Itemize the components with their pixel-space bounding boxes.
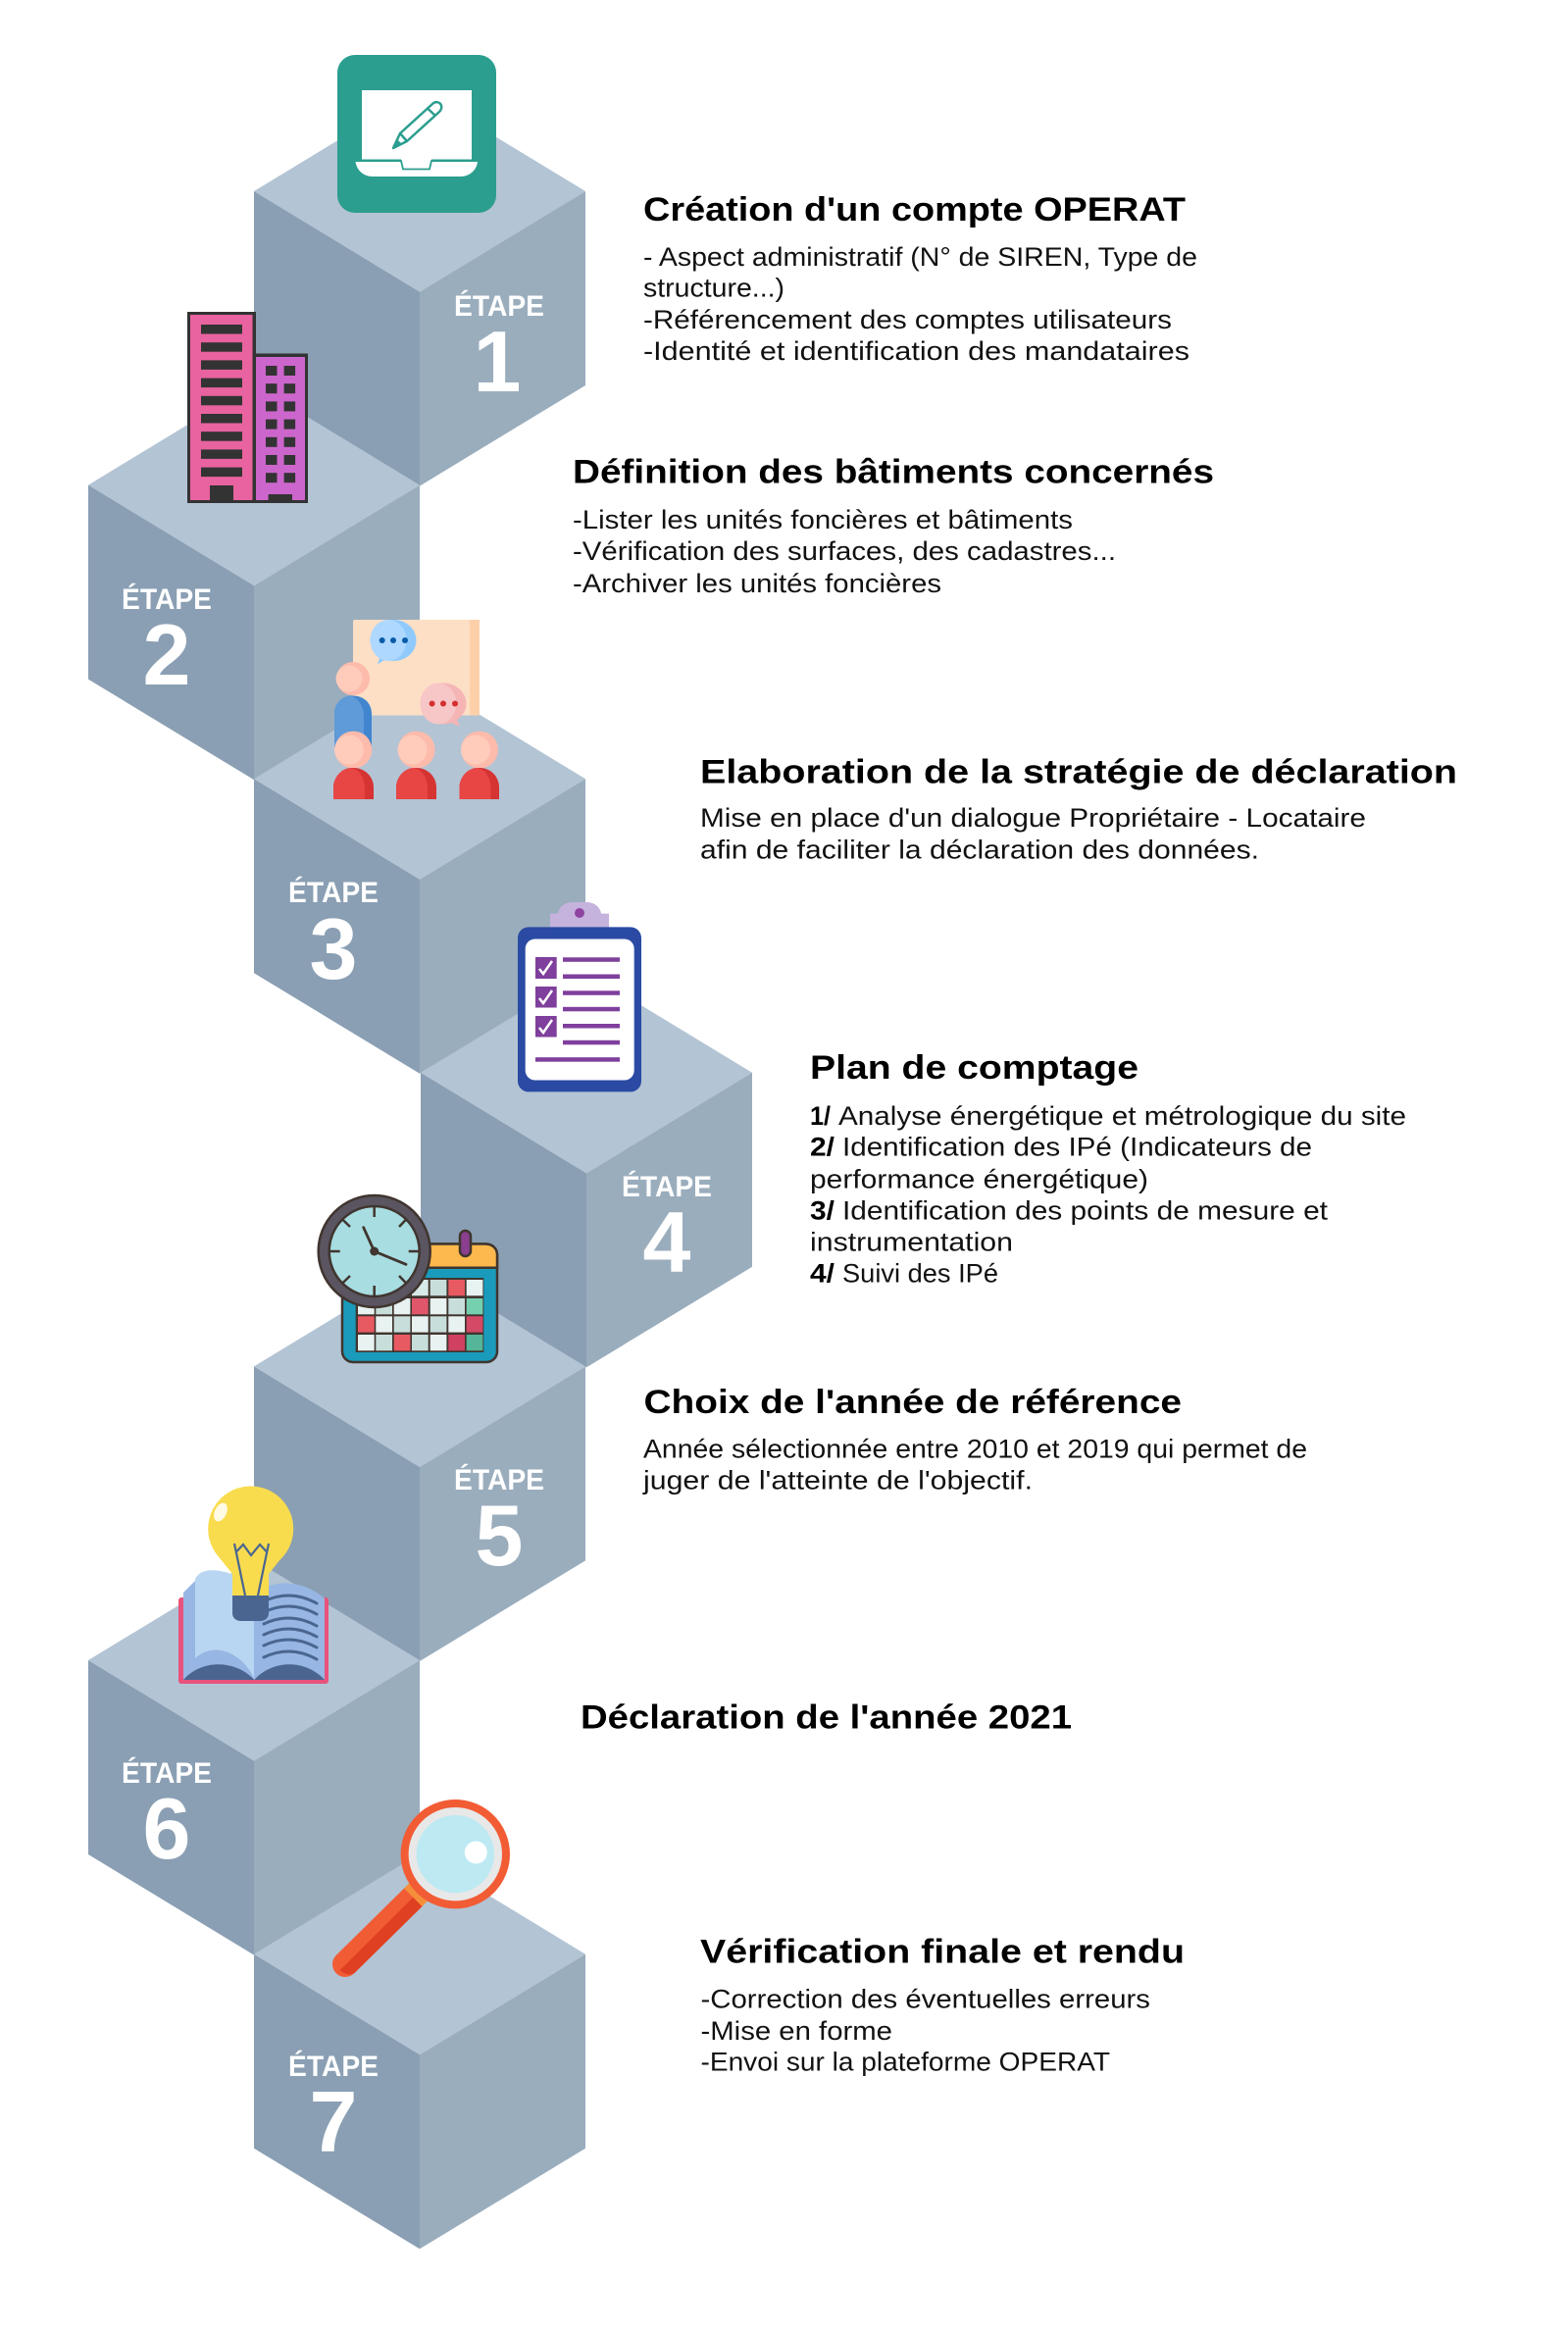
description: étape 1: - Aspect administratif (N° de SIREN, Type de [643, 242, 1197, 272]
heading: étape 7: Vérification finale et rendu [700, 1934, 1185, 1971]
icon: clipboard checklist [518, 902, 641, 1091]
label: étape 7: ÉTAPE [288, 2050, 379, 2083]
icon: open book and light bulb [178, 1487, 329, 1684]
description: étape 5: juger de l'atteinte de l'objectif. [642, 1465, 1033, 1495]
cube: étape 3 [254, 679, 585, 1074]
heading: étape 5: Choix de l'année de référence [643, 1384, 1182, 1421]
description: étape 4: 1/ [810, 1101, 831, 1131]
label: étape 5: 5 [476, 1487, 523, 1584]
label: étape 4: ÉTAPE [622, 1170, 712, 1203]
description: étape 4 [810, 1101, 1406, 1289]
description: étape 4: Analyse énergétique et métrologique du site [838, 1101, 1406, 1131]
label: étape 4: 4 [643, 1193, 691, 1291]
description: étape 1: -Identité et identification des mandataires [643, 336, 1189, 366]
cube: étape 6 [88, 1559, 420, 1955]
cube: étape 5 [254, 1266, 585, 1661]
label: étape 1: ÉTAPE [454, 289, 544, 323]
label: étape 7 [288, 2050, 379, 2170]
text block: étape 5 [642, 1384, 1307, 1495]
heading: étape 6: Déclaration de l'année 2021 [581, 1698, 1072, 1736]
icon: calendar and clock [319, 1195, 497, 1362]
label: étape 2: 2 [143, 606, 190, 703]
description: étape 1 [643, 242, 1197, 366]
label: étape 6: ÉTAPE [122, 1756, 212, 1790]
description: étape 2: -Archiver les unités foncières [573, 569, 941, 598]
label: étape 2 [122, 583, 212, 703]
text block: étape 7 [700, 1934, 1185, 2077]
cube: étape 4 [421, 972, 752, 1367]
description: étape 5: Année sélectionnée entre 2010 et 2019 qui permet de [643, 1434, 1307, 1463]
description: étape 3: afin de faciliter la déclaration des données. [700, 836, 1259, 865]
description: étape 4: 4/ [810, 1259, 835, 1289]
description: étape 7: -Envoi sur la plateforme OPERAT [700, 2048, 1110, 2077]
heading: étape 1: Création d'un compte OPERAT [643, 191, 1186, 228]
label: étape 6 [122, 1756, 212, 1877]
description: étape 4: 3/ [810, 1196, 835, 1226]
label: étape 3: 3 [310, 900, 357, 997]
label: étape 5: ÉTAPE [454, 1463, 544, 1496]
description: étape 2: -Vérification des surfaces, des cadastres... [573, 536, 1116, 566]
description: étape 7: -Mise en forme [700, 2016, 892, 2046]
cube: étape 1 [254, 90, 585, 486]
text block: étape 4 [810, 1049, 1406, 1289]
heading: étape 4: Plan de comptage [810, 1049, 1138, 1087]
icon: meeting with speech bubbles [333, 620, 499, 799]
label: étape 3 [288, 876, 379, 997]
description: étape 4: Suivi des IPé [842, 1259, 998, 1289]
label: étape 7: 7 [310, 2073, 357, 2170]
description: étape 3: Mise en place d'un dialogue Propriétaire - Locataire [700, 803, 1366, 833]
text block: étape 3 [700, 753, 1457, 865]
icon: buildings [187, 312, 308, 503]
label: étape 5 [454, 1463, 544, 1584]
cube: étape 7 [254, 1853, 585, 2249]
description: étape 4: Identification des points de mesure et [842, 1196, 1329, 1226]
label: étape 2: ÉTAPE [122, 583, 212, 616]
description: étape 2 [573, 505, 1116, 598]
label: étape 1 [454, 289, 544, 410]
description: étape 4: instrumentation [810, 1228, 1013, 1257]
label: étape 3: ÉTAPE [288, 876, 379, 909]
text block: étape 2 [573, 453, 1214, 598]
description: étape 1: structure...) [643, 273, 784, 302]
description: étape 3 [700, 803, 1366, 865]
heading: étape 3: Elaboration de la stratégie de déclaration [700, 753, 1457, 790]
description: étape 7: -Correction des éventuelles erreurs [700, 1985, 1150, 2014]
description: étape 1: -Référencement des comptes utilisateurs [643, 305, 1172, 334]
label: étape 6: 6 [143, 1780, 190, 1877]
description: étape 7 [700, 1985, 1150, 2077]
icon: magnifying glass [340, 1799, 510, 1974]
description: étape 4: 2/ [810, 1132, 835, 1161]
text block: étape 1 [643, 191, 1197, 366]
description: étape 4: performance énergétique) [810, 1165, 1148, 1194]
icon: laptop and pencil [337, 55, 496, 213]
cube: étape 2 [88, 384, 420, 780]
label: étape 1: 1 [474, 313, 521, 410]
description: étape 2: -Lister les unités foncières et bâtiments [573, 505, 1073, 534]
description: étape 4: Identification des IPé (Indicateurs de [842, 1132, 1312, 1161]
description: étape 5 [642, 1434, 1307, 1495]
heading: étape 2: Définition des bâtiments concernés [573, 453, 1214, 490]
label: étape 4 [622, 1170, 712, 1291]
